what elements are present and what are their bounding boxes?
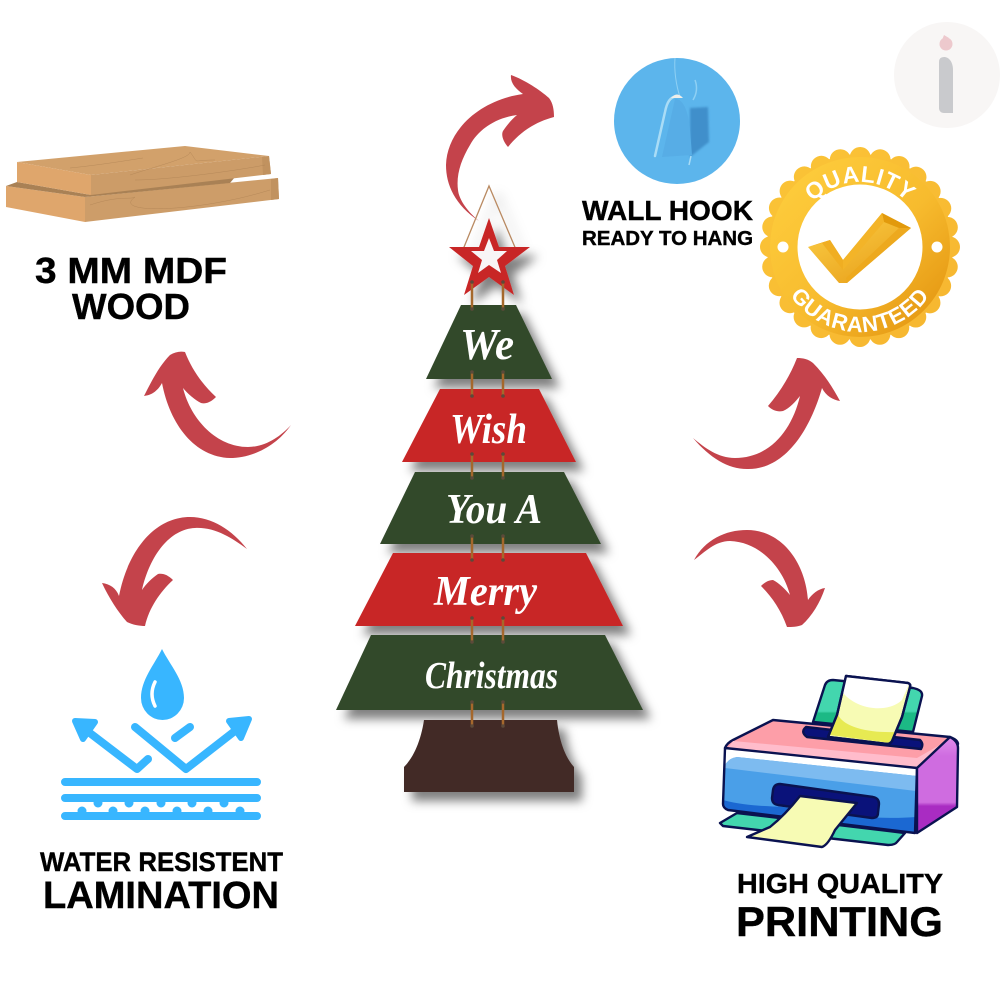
printer: paper tray back [813, 680, 922, 732]
heading: 3 mm MDF wood: 3 MM MDF [35, 250, 227, 291]
heading: 3 mm MDF wood [35, 250, 227, 327]
arrow: to wall hook [446, 75, 554, 221]
icon: quality guaranteed badge: GUARANTEED [793, 289, 926, 332]
printer: top slot [803, 727, 922, 749]
printer: top [725, 720, 958, 768]
deflected arrows [75, 719, 249, 769]
heading: wall hook ready to hang: WALL HOOK [582, 195, 753, 226]
tree tier: You A [380, 472, 601, 544]
heading: wall hook ready to hang: READY TO HANG [582, 228, 753, 250]
badge: check mark [808, 213, 911, 283]
printer: output paper [747, 796, 857, 847]
icon: printer [720, 676, 958, 847]
heading: 3 mm MDF wood: WOOD [72, 286, 190, 327]
tree tier: Christmas [336, 635, 643, 710]
icon: wall hook [614, 58, 740, 184]
tree tier: We: We [460, 320, 514, 369]
tree tier: You A: You A [446, 487, 542, 533]
arrow: to lamination [102, 517, 247, 626]
heading: water resistent lamination: LAMINATION [43, 875, 279, 917]
tree tier: We [426, 305, 552, 379]
icon: wood planks [6, 146, 279, 222]
printer: side [917, 737, 958, 833]
icon: quality guaranteed badge: QUALITY [806, 166, 917, 198]
printer: bottom tray [720, 813, 905, 845]
arrow: to quality badge [693, 358, 840, 469]
printer: front slot [772, 784, 879, 818]
logo watermark [894, 22, 1000, 128]
tree tier: Merry [355, 553, 623, 626]
tree tier: Merry: Merry [433, 569, 537, 615]
christmas tree hanging [336, 186, 643, 792]
tree: trunk base [404, 720, 574, 792]
icon: water resistant lamination [65, 649, 257, 816]
heading: water resistent lamination: WATER RESISTENT [40, 847, 283, 877]
tree: connecting strings [470, 280, 505, 728]
heading: high quality printing [736, 868, 943, 945]
tree tier: Wish: Wish [450, 407, 527, 453]
printer: front [723, 748, 917, 833]
arrow: to wood [144, 352, 291, 458]
tree: star [449, 218, 530, 295]
layers [65, 782, 257, 816]
tree tier: Wish [402, 389, 576, 462]
water drop [141, 649, 184, 720]
heading: wall hook ready to hang [582, 195, 753, 250]
printer: back paper [828, 676, 910, 744]
arrow: to printing [694, 530, 825, 627]
heading: high quality printing: HIGH QUALITY [737, 868, 943, 899]
icon: quality guaranteed badge [760, 147, 960, 347]
tree: hanger string [462, 186, 517, 252]
heading: water resistent lamination [40, 847, 283, 917]
heading: high quality printing: PRINTING [736, 898, 943, 945]
tree tier: Christmas: Christmas [425, 655, 558, 697]
